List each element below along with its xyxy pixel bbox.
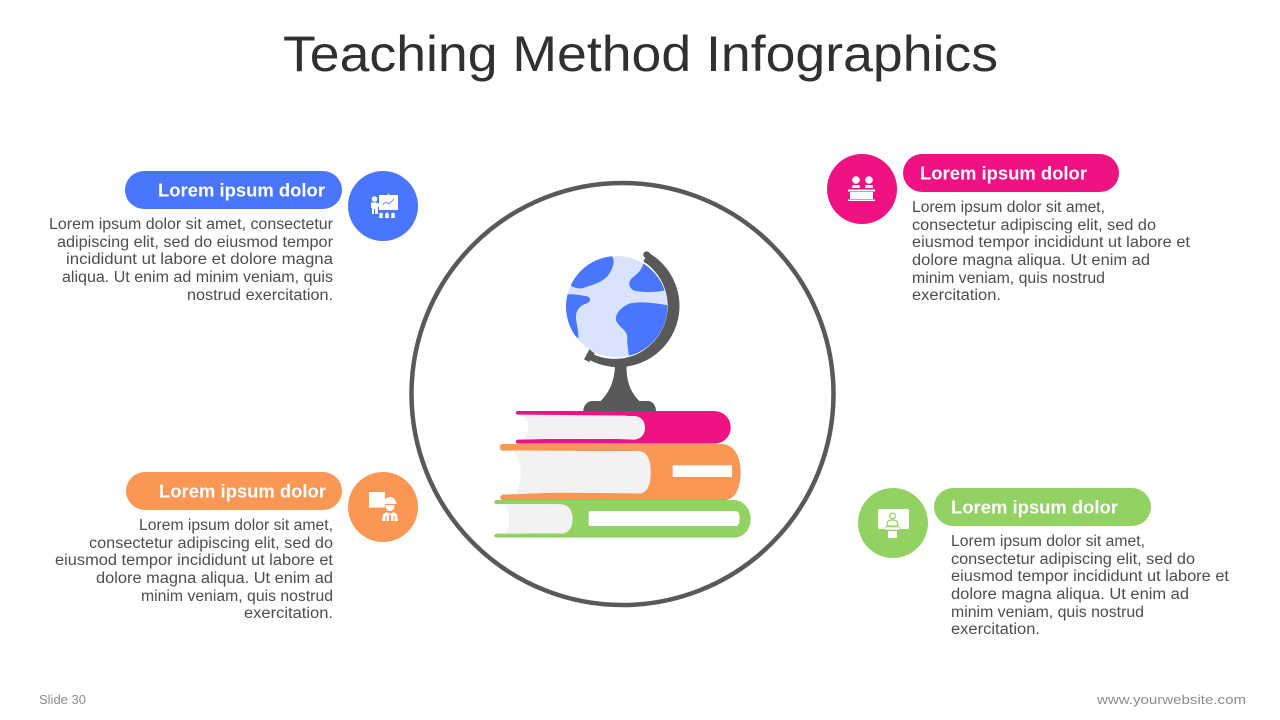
green body text bbox=[951, 533, 1230, 638]
green pill heading bbox=[934, 488, 1151, 526]
pink body text: Lorem ipsum dolor sit amet, bbox=[912, 199, 1105, 216]
pink body text: dolore magna aliqua. Ut enim ad bbox=[912, 252, 1150, 269]
orange body text: consectetur adipiscing elit, sed do bbox=[89, 535, 333, 552]
green body text: minim veniam, quis nostrud bbox=[951, 604, 1144, 621]
blue body text: Lorem ipsum dolor sit amet, consectetur bbox=[49, 216, 333, 233]
panel: pink, top right bbox=[827, 154, 1191, 304]
blue body text bbox=[49, 216, 333, 304]
blue body text: incididunt ut labore et dolore magna bbox=[66, 251, 333, 268]
globe arm bbox=[588, 253, 679, 367]
orange body text bbox=[55, 517, 334, 622]
globe bbox=[563, 251, 679, 411]
green book bbox=[494, 500, 751, 538]
blue body text: aliqua. Ut enim ad minim veniam, quis bbox=[62, 269, 333, 286]
green body text: consectetur adipiscing elit, sed do bbox=[951, 551, 1195, 568]
green pill heading: Lorem ipsum dolor bbox=[951, 498, 1118, 518]
panel: green, bottom right bbox=[858, 488, 1230, 638]
orange pill heading bbox=[126, 472, 342, 510]
orange pill heading: Lorem ipsum dolor bbox=[159, 482, 326, 502]
illustration: globe on stacked books bbox=[494, 251, 751, 538]
icon: teacher at presentation board bbox=[348, 171, 418, 241]
green body text: dolore magna aliqua. Ut enim ad bbox=[951, 586, 1189, 603]
icon: instructor with board bbox=[348, 472, 418, 542]
orange body text: eiusmod tempor incididunt ut labore et bbox=[55, 552, 334, 569]
green body text: eiusmod tempor incididunt ut labore et bbox=[951, 568, 1230, 585]
green body text: Lorem ipsum dolor sit amet, bbox=[951, 533, 1145, 550]
blue pill heading bbox=[125, 171, 342, 209]
orange body text: dolore magna aliqua. Ut enim ad bbox=[96, 570, 333, 587]
website: www.yourwebsite.com bbox=[1096, 693, 1246, 707]
green body text: exercitation. bbox=[951, 621, 1040, 638]
blue body text: nostrud exercitation. bbox=[187, 287, 333, 304]
title: Teaching Method Infographics bbox=[283, 26, 998, 82]
pink book bbox=[516, 411, 731, 444]
pink pill heading: Lorem ipsum dolor bbox=[920, 164, 1087, 184]
slide number: Slide 30 bbox=[39, 693, 86, 707]
pink body text: consectetur adipiscing elit, sed do bbox=[912, 217, 1156, 234]
panel: blue, top left bbox=[49, 171, 418, 304]
orange body text: exercitation. bbox=[244, 605, 333, 622]
pink body text bbox=[912, 199, 1191, 304]
icon: speaker at podium bbox=[858, 488, 928, 558]
globe stand bbox=[583, 364, 656, 411]
blue pill heading: Lorem ipsum dolor bbox=[158, 180, 325, 200]
pink body text: eiusmod tempor incididunt ut labore et bbox=[912, 234, 1191, 251]
orange book bbox=[500, 444, 741, 500]
pink pill heading bbox=[903, 154, 1119, 192]
orange body text: minim veniam, quis nostrud bbox=[141, 588, 333, 605]
icon: two speakers at desk bbox=[827, 154, 897, 224]
blue body text: adipiscing elit, sed do eiusmod tempor bbox=[57, 234, 333, 251]
pink body text: minim veniam, quis nostrud bbox=[912, 270, 1105, 287]
pink body text: exercitation. bbox=[912, 287, 1001, 304]
central circle bbox=[412, 183, 834, 605]
orange body text: Lorem ipsum dolor sit amet, bbox=[139, 517, 333, 534]
panel: orange, bottom left bbox=[55, 472, 418, 622]
